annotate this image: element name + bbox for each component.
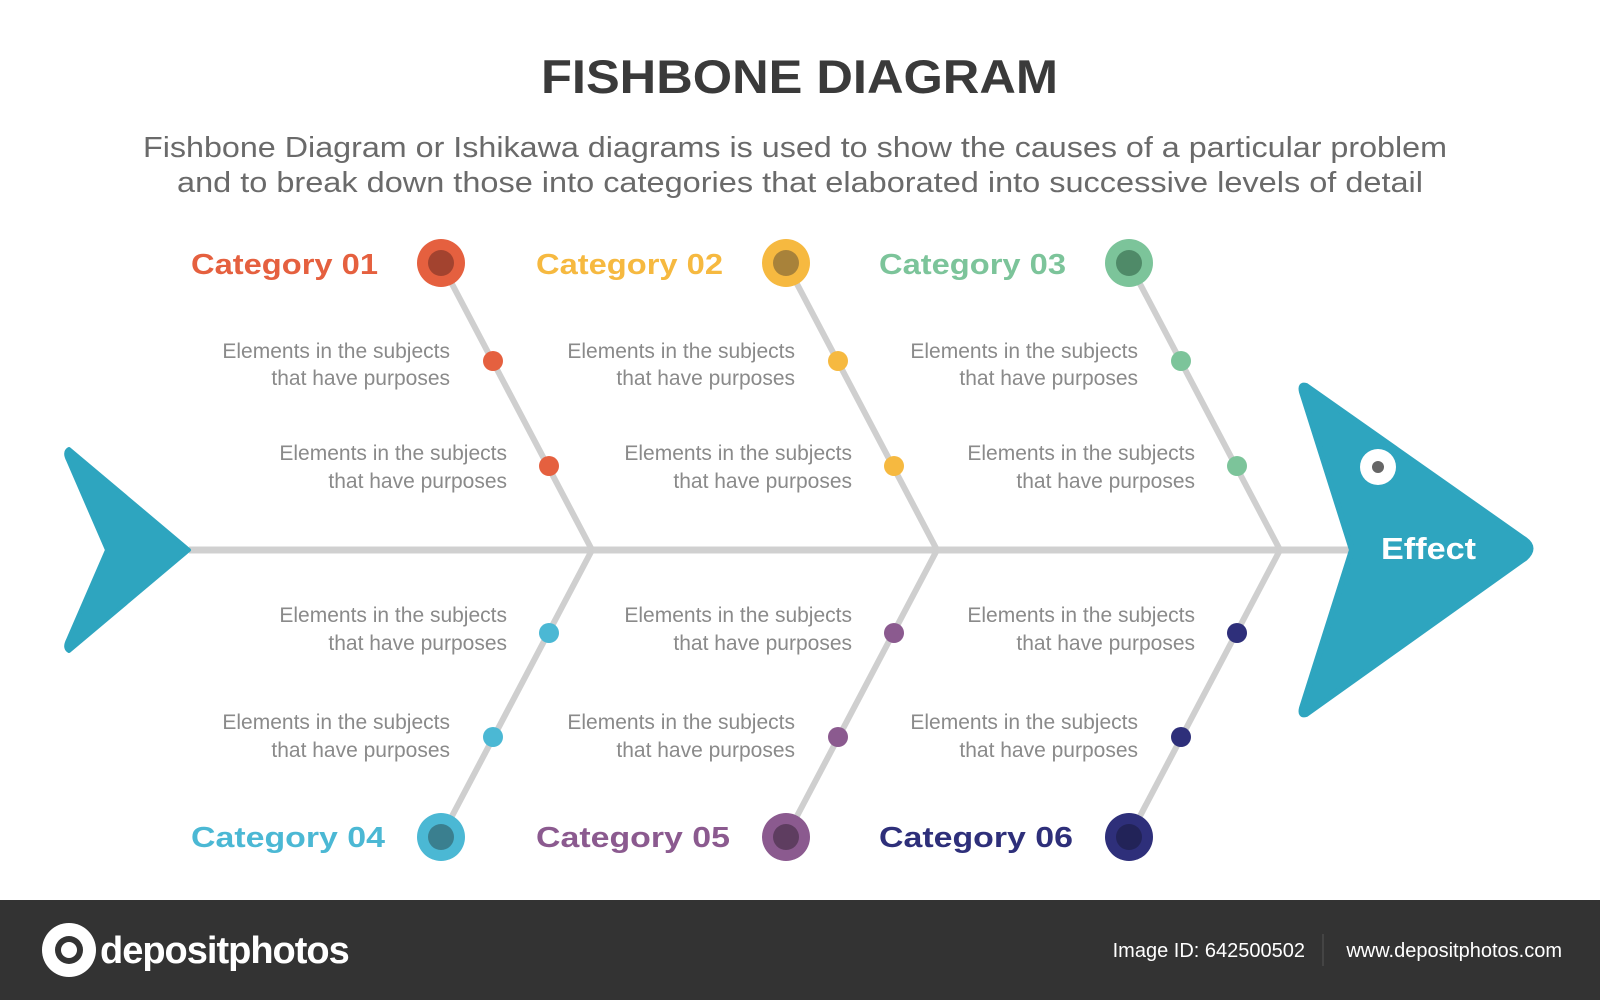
icon: camera logo bbox=[42, 923, 96, 977]
fish head: effect bbox=[1302, 386, 1530, 714]
subtitle: Fishbone Diagram or Ishikawa diagrams is used to show the causes of a particular problem bbox=[143, 132, 1447, 164]
branch: category 02: that have purposes bbox=[616, 367, 795, 390]
branch: category 04: Category 04 bbox=[191, 822, 385, 854]
branch: category 04: that have purposes bbox=[328, 632, 507, 655]
title: FISHBONE DIAGRAM bbox=[541, 50, 1058, 103]
branch: category 05 bbox=[536, 604, 904, 861]
branch: category 02: Elements in the subjects bbox=[624, 442, 852, 465]
branch: category 02: Elements in the subjects bbox=[567, 340, 795, 363]
branch: category 04 bbox=[191, 604, 559, 861]
branch: category 03: Elements in the subjects bbox=[910, 340, 1138, 363]
branch: category 04: that have purposes bbox=[271, 739, 450, 762]
branch: category 06: Category 06 bbox=[879, 822, 1073, 854]
bones bbox=[441, 263, 1280, 837]
spine bbox=[189, 546, 1350, 554]
branch: category 03: that have purposes bbox=[959, 367, 1138, 390]
branch: category 01: that have purposes bbox=[271, 367, 450, 390]
branch: category 06 bbox=[879, 604, 1247, 861]
branch: category 05: Elements in the subjects bbox=[624, 604, 852, 627]
branch: category 02: Category 02 bbox=[536, 249, 723, 281]
branch: category 01: Elements in the subjects bbox=[279, 442, 507, 465]
branch: category 06: that have purposes bbox=[1016, 632, 1195, 655]
effect label: Effect bbox=[1381, 531, 1476, 566]
branch: category 01 bbox=[191, 239, 559, 493]
image id: Image ID: 642500502 bbox=[1113, 940, 1305, 962]
logo text: depositphotos bbox=[100, 930, 349, 972]
branch: category 05: that have purposes bbox=[616, 739, 795, 762]
branch: category 02 bbox=[536, 239, 904, 493]
branch: category 01: Category 01 bbox=[191, 249, 378, 281]
branch: category 01: that have purposes bbox=[328, 470, 507, 493]
subtitle: and to break down those into categories that elaborated into successive levels of detail bbox=[177, 167, 1423, 199]
icon: fish tail bbox=[66, 449, 189, 651]
branch: category 03: Elements in the subjects bbox=[967, 442, 1195, 465]
branch: category 02: that have purposes bbox=[673, 470, 852, 493]
footer bar bbox=[0, 900, 1600, 1000]
branch: category 04: Elements in the subjects bbox=[279, 604, 507, 627]
icon: eye bbox=[1360, 449, 1396, 485]
subtitle bbox=[143, 132, 1447, 199]
website: www.depositphotos.com bbox=[1345, 940, 1562, 962]
branch: category 05: Category 05 bbox=[536, 822, 730, 854]
branch: category 05: Elements in the subjects bbox=[567, 711, 795, 734]
branch: category 06: Elements in the subjects bbox=[967, 604, 1195, 627]
branch: category 06: that have purposes bbox=[959, 739, 1138, 762]
branch: category 06: Elements in the subjects bbox=[910, 711, 1138, 734]
branch: category 01: Elements in the subjects bbox=[222, 340, 450, 363]
branch: category 03: that have purposes bbox=[1016, 470, 1195, 493]
branch: category 05: that have purposes bbox=[673, 632, 852, 655]
branch: category 03: Category 03 bbox=[879, 249, 1066, 281]
branch: category 04: Elements in the subjects bbox=[222, 711, 450, 734]
branch: category 03 bbox=[879, 239, 1247, 493]
